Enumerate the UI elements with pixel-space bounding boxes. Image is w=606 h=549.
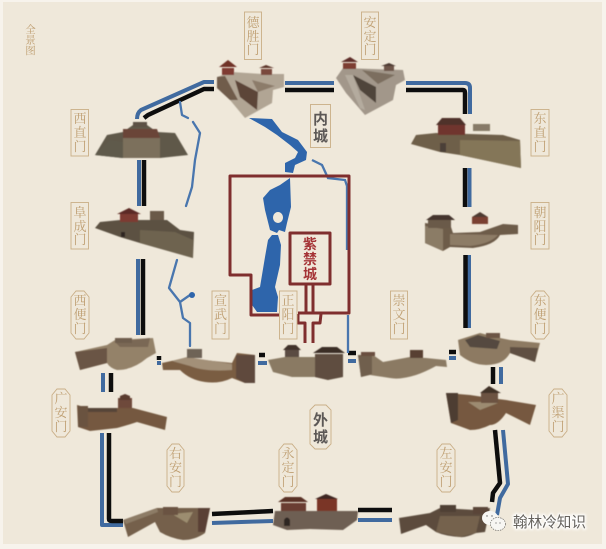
label: Zuoanmen	[437, 444, 455, 492]
label: Xizhimen: 门	[73, 139, 87, 154]
label: Andingmen: 定	[363, 29, 377, 44]
gate: Dongzhi	[411, 118, 521, 168]
label: Xizhimen	[71, 110, 88, 156]
icon: chat bubbles	[482, 511, 506, 530]
label: Inner City: 内	[313, 111, 328, 128]
label: Guanganmen: 门	[54, 419, 68, 434]
label: Dongbianmen: 便	[533, 307, 547, 322]
label: Yongdingmen: 永	[281, 446, 295, 461]
label: Forbidden City: 禁	[303, 251, 317, 267]
label: Xuanwumen: 宣	[214, 293, 227, 308]
label: Andingmen: 安	[363, 15, 377, 30]
label: Inner City: 城	[313, 127, 328, 145]
label: Chaoyangmen: 朝	[533, 205, 547, 220]
label: Deshengmen	[244, 12, 262, 60]
gates	[75, 57, 540, 540]
label: Chaoyangmen: 门	[533, 232, 547, 247]
label: Xuanwumen: 门	[214, 321, 227, 336]
label: Chaoyangmen: 阳	[533, 219, 547, 234]
label: Yongdingmen: 定	[281, 460, 295, 475]
label: Chongwenmen: 崇	[392, 293, 406, 308]
label: Xizhimen: 直	[73, 125, 87, 140]
label: Dongzhimen	[531, 110, 549, 156]
label: Zuoanmen: 左	[439, 446, 453, 461]
label: Inner City	[310, 104, 330, 148]
label: Chongwenmen: 门	[392, 321, 406, 336]
watermark text: 翰林冷知识	[513, 514, 586, 531]
imperial city wall	[230, 176, 349, 343]
label: Guanganmen: 广	[54, 391, 68, 406]
label: Chaoyangmen	[531, 202, 549, 249]
label: Outer City: 城	[313, 428, 328, 446]
label: Guangqumen	[549, 389, 567, 437]
north lake	[249, 118, 307, 173]
label: Dongzhimen: 东	[533, 111, 547, 126]
label: Yongdingmen	[279, 444, 297, 492]
label: Chongwenmen	[390, 291, 408, 339]
gate: Dongbian	[458, 333, 540, 365]
label: Dongbianmen: 东	[533, 293, 547, 308]
outer imperial wall	[230, 176, 349, 315]
label: panorama: 景	[25, 34, 36, 46]
label: Guangqumen: 门	[551, 419, 565, 434]
label: Fuchengmen: 阜	[73, 205, 87, 220]
label: Youanmen: 右	[169, 446, 182, 461]
label: Guanganmen: 安	[54, 405, 68, 420]
label: Xizhimen: 西	[73, 111, 87, 126]
label: Zuoanmen: 门	[439, 474, 453, 489]
inner and outer city walls	[102, 82, 508, 525]
label: Youanmen: 门	[169, 474, 182, 489]
label: Xibianmen	[71, 291, 89, 339]
Forbidden City box	[290, 233, 330, 284]
gate: Guangan	[77, 394, 167, 431]
label: Zhengyangmen: 阳	[281, 307, 295, 322]
gate: Zhengyang	[268, 345, 345, 380]
label: Yongdingmen: 门	[281, 474, 295, 489]
label: Xibianmen: 门	[73, 321, 87, 336]
central lake	[263, 178, 291, 233]
west river	[169, 102, 200, 346]
label: Dongbianmen	[531, 291, 549, 339]
gate: Chaoyang	[425, 212, 518, 251]
watermark text: 翰林冷知识	[513, 514, 586, 531]
rivers and lakes	[169, 102, 348, 353]
label: Xuanwumen	[212, 291, 229, 339]
east river	[312, 160, 348, 353]
label: Forbidden City	[303, 236, 317, 282]
label: Zhengyangmen: 正	[281, 293, 295, 308]
label: Andingmen	[362, 12, 378, 60]
label: Xibianmen: 西	[73, 293, 87, 308]
gate: Fucheng	[95, 208, 194, 258]
gate: Youan	[123, 507, 210, 540]
label: Guangqumen: 渠	[551, 405, 565, 420]
gate: Desheng	[217, 60, 284, 118]
label: Forbidden City: 城	[303, 266, 317, 282]
label: Dongzhimen: 门	[533, 139, 547, 154]
gate: Chongwen	[358, 350, 447, 379]
label: Xibianmen: 便	[73, 307, 87, 322]
label: Deshengmen: 胜	[246, 29, 260, 44]
gate: Xibian	[75, 338, 156, 370]
label: Youanmen	[167, 444, 184, 492]
wall: blue moat line	[102, 82, 508, 525]
label: Xuanwumen: 武	[214, 307, 227, 322]
label: panorama: 图	[25, 45, 36, 57]
label: Fuchengmen: 门	[73, 232, 87, 247]
label: Deshengmen: 门	[246, 42, 260, 57]
gate: Guangqu	[446, 386, 536, 430]
label: Dongzhimen: 直	[533, 125, 547, 140]
label: Deshengmen: 德	[246, 15, 260, 30]
gate: Anding	[336, 57, 405, 115]
label: panorama: 全	[25, 23, 36, 36]
label: Outer City: 外	[313, 411, 328, 429]
gate: Xizhi	[95, 122, 188, 158]
label: Zhengyangmen	[280, 291, 297, 339]
axis walls	[298, 285, 321, 343]
label: Zuoanmen: 安	[439, 460, 453, 475]
label: Zhengyangmen: 门	[281, 321, 295, 336]
label: Chongwenmen: 文	[392, 307, 406, 322]
label: Guangqumen: 广	[551, 391, 565, 406]
label: Fuchengmen: 成	[73, 219, 87, 234]
label: Youanmen: 安	[169, 460, 182, 475]
label: Outer City	[310, 405, 331, 449]
watermark	[482, 511, 586, 531]
label: Fuchengmen	[71, 202, 88, 249]
label: Dongbianmen: 门	[533, 321, 547, 336]
gate: Xuanwu	[162, 349, 255, 383]
label: Guanganmen	[52, 389, 70, 437]
label: Forbidden City: 紫	[303, 236, 317, 252]
south lake	[250, 235, 281, 312]
gate: Zuoan	[399, 505, 490, 537]
label: panorama	[25, 23, 36, 57]
label: Andingmen: 门	[363, 42, 377, 57]
wall: black city line	[109, 89, 500, 521]
gate: Yongding	[273, 494, 358, 530]
